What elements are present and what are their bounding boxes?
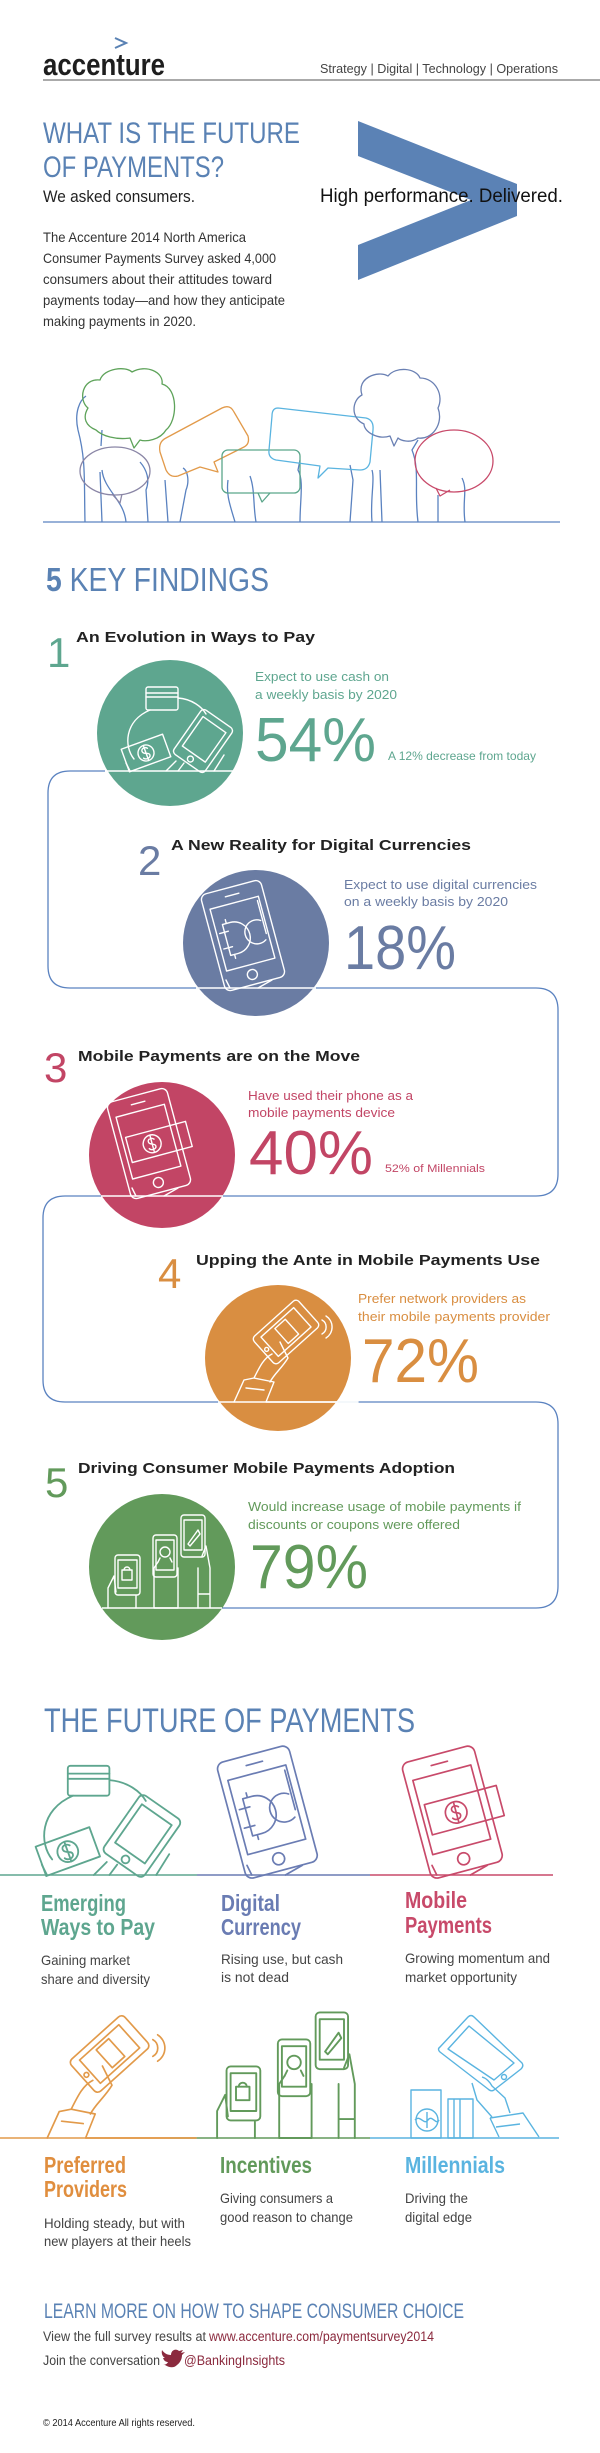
panel: millennials: digital edge (405, 2209, 472, 2225)
icon circle: incentives (89, 1494, 235, 1640)
heading: 5 key findings: 5 KEY FINDINGS (46, 561, 269, 598)
stat 4: their mobile payments provider (358, 1309, 551, 1324)
stat 5 (248, 1499, 521, 1602)
intro text: making payments in 2020. (43, 313, 196, 329)
copyright: © 2014 Accenture All rights reserved. (43, 2418, 195, 2429)
finding 3 (44, 1044, 486, 1228)
panel: emerging ways to pay: Emerging (41, 1890, 126, 1916)
panel: preferred providers: Providers (44, 2176, 127, 2202)
stat 2 (344, 877, 538, 983)
stat 1: A 12% decrease from today (388, 749, 536, 763)
panel: mobile payments (405, 1887, 550, 1985)
panel: preferred providers: Holding steady, but with (44, 2215, 185, 2231)
stat 1: Expect to use cash on (255, 669, 389, 684)
intro text: The Accenture 2014 North America (43, 229, 246, 245)
stat 4: 72% (362, 1327, 479, 1396)
panel: preferred providers (44, 2152, 191, 2249)
header: accenture logo (43, 38, 165, 82)
finding 1 (47, 629, 536, 806)
panel: millennials: Driving the (405, 2190, 468, 2206)
stat 3: 40% (249, 1119, 373, 1188)
stat 4 (358, 1291, 551, 1396)
panel: mobile payments: Payments (405, 1912, 492, 1938)
stat 1: 54% (255, 706, 376, 775)
icon: preferred providers (47, 2014, 196, 2138)
stat 4: Prefer network providers as (358, 1291, 527, 1306)
row 1 icons (0, 1741, 553, 1880)
chevron logo mark (358, 121, 517, 280)
slogan: High performance. Delivered. (320, 186, 563, 207)
finding 1 title: An Evolution in Ways to Pay (76, 629, 316, 646)
footer call to action: @BankingInsights (184, 2353, 285, 2368)
stat 1 (255, 669, 536, 775)
finding 5 (45, 1459, 521, 1640)
number 2: 2 (138, 837, 161, 884)
finding 4 title: Upping the Ante in Mobile Payments Use (196, 1252, 540, 1269)
icon: incentives (217, 2012, 355, 2138)
intro text (43, 229, 285, 329)
stat 1: a weekly basis by 2020 (255, 687, 397, 702)
finding 2 title: A New Reality for Digital Currencies (171, 837, 471, 854)
stat 5: discounts or coupons were offered (248, 1517, 460, 1532)
illustration: people holding speech bubbles (43, 369, 560, 522)
stat 3: Have used their phone as a (248, 1088, 414, 1103)
stat 5: Would increase usage of mobile payments if (248, 1499, 521, 1514)
footer call to action: www.accenture.com/paymentsurvey2014 (208, 2329, 434, 2344)
number 3: 3 (44, 1044, 67, 1091)
stat 2: Expect to use digital currencies (344, 877, 538, 892)
panel: millennials (405, 2152, 505, 2225)
connector snake line (43, 771, 558, 1608)
stat 3: mobile payments device (248, 1105, 395, 1120)
panel: mobile payments: Growing momentum and (405, 1950, 550, 1966)
header tagline: Strategy | Digital | Technology | Operations (320, 61, 558, 76)
title: OF PAYMENTS? (43, 151, 224, 184)
stat 3: 52% of Millennials (385, 1163, 486, 1175)
icon: digital currency (216, 1745, 319, 1880)
panel: incentives: Incentives (220, 2152, 312, 2178)
panel: incentives: good reason to change (220, 2209, 353, 2225)
panel: mobile payments: market opportunity (405, 1969, 517, 1985)
title (43, 117, 300, 184)
intro text: payments today—and how they anticipate (43, 292, 285, 308)
intro text: Consumer Payments Survey asked 4,000 (43, 250, 276, 266)
number 1: 1 (47, 629, 70, 676)
row 2 icons (0, 2012, 559, 2138)
panel: digital currency: Rising use, but cash (221, 1951, 343, 1967)
footer call to action: Join the conversation (43, 2353, 160, 2368)
panel: mobile payments: Mobile (405, 1887, 467, 1913)
icon circle: mobile payments (89, 1082, 235, 1228)
panel: incentives (220, 2152, 353, 2225)
footer call to action (43, 2300, 464, 2368)
panel: emerging ways to pay: Ways to Pay (41, 1914, 155, 1940)
finding 5 title: Driving Consumer Mobile Payments Adoption (78, 1460, 455, 1477)
stat 3 (248, 1088, 486, 1188)
icon: emerging ways to pay (36, 1766, 182, 1879)
panel: emerging ways to pay: share and diversity (41, 1971, 150, 1987)
stat 5: 79% (250, 1533, 368, 1602)
panel: millennials: Millennials (405, 2152, 505, 2178)
heading: the future of payments: THE FUTURE OF PAYMENTS (44, 1702, 415, 1740)
finding 4 (158, 1250, 551, 1431)
icon circle: ways to pay (97, 660, 243, 806)
title: WHAT IS THE FUTURE (43, 117, 300, 150)
icon circle: preferred providers (205, 1285, 358, 1431)
panel: incentives: Giving consumers a (220, 2190, 333, 2206)
footer call to action: LEARN MORE ON HOW TO SHAPE CONSUMER CHOICE (44, 2300, 464, 2323)
panel: preferred providers: Preferred (44, 2152, 126, 2178)
panel: emerging ways to pay (41, 1890, 155, 1987)
panel: preferred providers: new players at their heels (44, 2233, 191, 2249)
stat 2: on a weekly basis by 2020 (344, 894, 508, 909)
panel: emerging ways to pay: Gaining market (41, 1952, 130, 1968)
number 4: 4 (158, 1250, 181, 1297)
icon: mobile payments (401, 1741, 515, 1880)
icon circle: digital currency (183, 870, 329, 1016)
panel: digital currency: is not dead (221, 1969, 289, 1985)
panel: digital currency (221, 1890, 343, 1985)
icon: twitter bird (162, 2350, 185, 2367)
finding 2 (138, 837, 538, 1016)
intro text: consumers about their attitudes toward (43, 271, 272, 287)
number 5: 5 (45, 1459, 68, 1506)
finding 3 title: Mobile Payments are on the Move (78, 1048, 360, 1065)
header: accenture logo: accenture (43, 47, 165, 82)
panel: digital currency: Digital (221, 1890, 280, 1916)
icon: millennials (411, 2016, 539, 2138)
panel: digital currency: Currency (221, 1914, 301, 1940)
stat 2: 18% (344, 914, 456, 983)
subtitle: We asked consumers. (43, 187, 195, 206)
footer call to action: View the full survey results at (43, 2329, 206, 2344)
